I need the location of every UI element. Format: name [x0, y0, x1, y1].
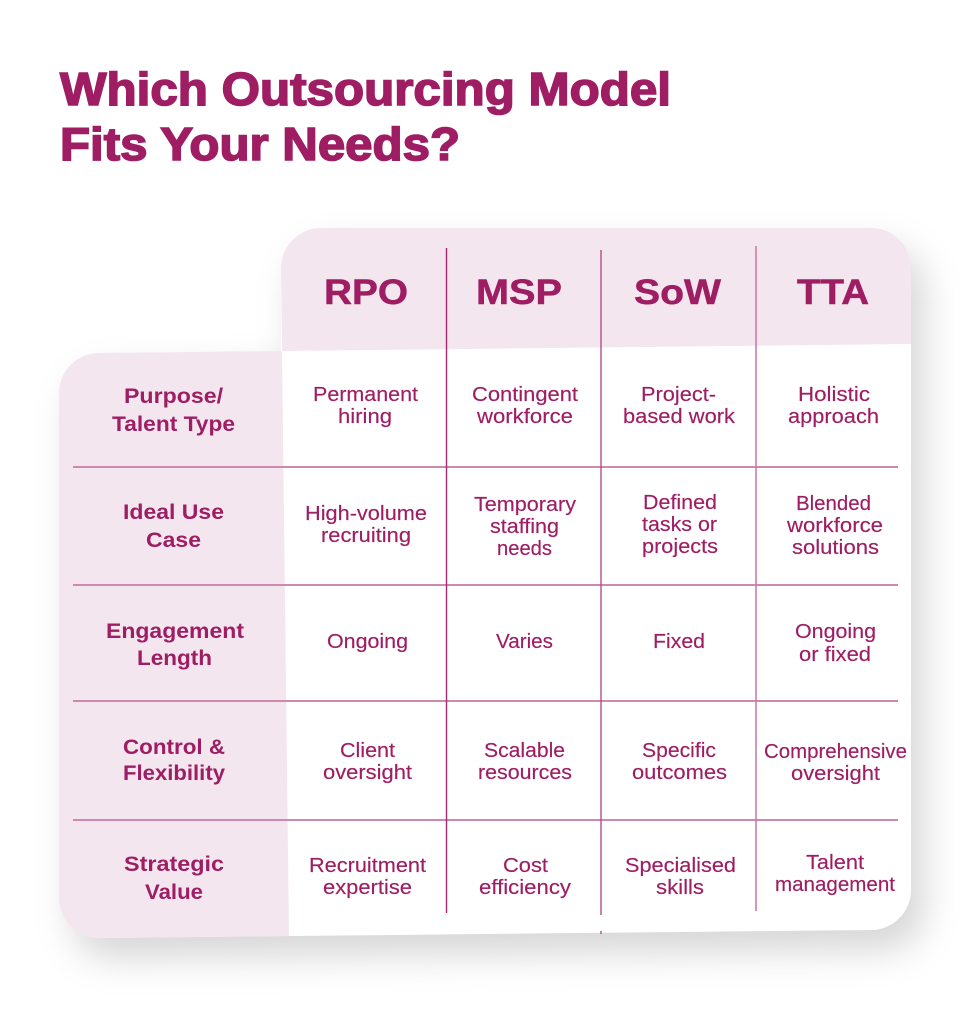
row: ideal use case cells — [305, 492, 883, 560]
row: ideal use case cells: projects — [642, 536, 718, 558]
header band — [281, 228, 911, 351]
row: ideal use case cells: High-volume — [305, 503, 427, 525]
row: purpose cells: Contingent — [472, 384, 578, 406]
grid lines — [73, 246, 898, 934]
row: strategic value cells: Recruitment — [309, 855, 426, 877]
column headers: TTA — [797, 273, 869, 312]
row: purpose cells — [313, 384, 879, 428]
row: ideal use case cells: solutions — [792, 537, 879, 559]
row: ideal use case cells: needs — [497, 538, 552, 560]
row: ideal use case cells: staffing — [490, 516, 559, 538]
row: strategic value cells: expertise — [323, 877, 412, 899]
row: engagement length cells — [327, 621, 876, 666]
row: ideal use case cells: Temporary — [474, 494, 576, 516]
row: strategic value cells: skills — [656, 877, 704, 899]
row: engagement length cells: Ongoing — [327, 631, 408, 653]
row: ideal use case cells: tasks or — [642, 514, 717, 536]
row: control and flexibility cells: Client — [340, 740, 395, 762]
row: purpose cells: hiring — [338, 406, 392, 428]
row label: engagement length: Length — [137, 646, 212, 670]
row: purpose cells: Permanent — [313, 384, 418, 406]
title: Fits Your Needs? — [60, 118, 460, 170]
title — [60, 63, 671, 170]
row label: control and flexibility: Control & — [123, 735, 225, 759]
column headers — [324, 273, 869, 312]
row: strategic value cells: efficiency — [479, 877, 571, 899]
row label: purpose: Purpose/ — [124, 384, 223, 408]
row: control and flexibility cells: oversight — [791, 763, 880, 785]
row label: ideal use case: Ideal Use — [123, 500, 224, 524]
row label: engagement length — [106, 619, 244, 670]
row: purpose cells: Holistic — [798, 384, 870, 406]
row: strategic value cells: Talent — [806, 852, 864, 874]
row label: purpose — [112, 384, 235, 436]
row: purpose cells: based work — [623, 406, 736, 428]
row label: control and flexibility — [123, 735, 225, 785]
row label: ideal use case — [123, 500, 224, 552]
row label: engagement length: Engagement — [106, 619, 244, 643]
column headers: MSP — [476, 273, 562, 312]
panel: comparison table — [59, 228, 924, 958]
row label: strategic value: Strategic — [124, 852, 224, 876]
row: control and flexibility cells: resources — [478, 762, 572, 784]
row: control and flexibility cells: Comprehensive — [764, 741, 907, 763]
column headers: SoW — [634, 273, 721, 312]
row label: strategic value — [124, 852, 224, 904]
row: ideal use case cells: Blended — [796, 493, 871, 515]
row: ideal use case cells: workforce — [786, 515, 883, 537]
card background — [59, 228, 911, 938]
row: purpose cells: Project- — [641, 384, 716, 406]
row: control and flexibility cells: Scalable — [484, 740, 565, 762]
row: purpose cells: workforce — [476, 406, 573, 428]
row: ideal use case cells: Defined — [643, 492, 717, 514]
card shadow — [72, 248, 924, 958]
row: engagement length cells: Fixed — [653, 631, 705, 653]
row: purpose cells: approach — [788, 406, 879, 428]
row: engagement length cells: or fixed — [799, 644, 871, 666]
row: strategic value cells: Cost — [503, 855, 548, 877]
row label: control and flexibility: Flexibility — [123, 761, 225, 785]
row: engagement length cells: Ongoing — [795, 621, 876, 643]
row: strategic value cells: management — [775, 874, 895, 896]
row label: strategic value: Value — [145, 880, 203, 904]
row: engagement length cells: Varies — [496, 631, 553, 653]
row: strategic value cells — [309, 852, 895, 899]
row label band — [59, 351, 289, 938]
row: control and flexibility cells — [323, 740, 907, 785]
row: control and flexibility cells: outcomes — [632, 762, 727, 784]
row: strategic value cells: Specialised — [625, 855, 736, 877]
title: Which Outsourcing Model — [60, 63, 671, 115]
row label: purpose: Talent Type — [112, 412, 235, 436]
row: control and flexibility cells: Specific — [642, 740, 716, 762]
row label: ideal use case: Case — [146, 528, 201, 552]
row: control and flexibility cells: oversight — [323, 762, 412, 784]
row: ideal use case cells: recruiting — [321, 525, 411, 547]
column headers: RPO — [324, 273, 408, 312]
